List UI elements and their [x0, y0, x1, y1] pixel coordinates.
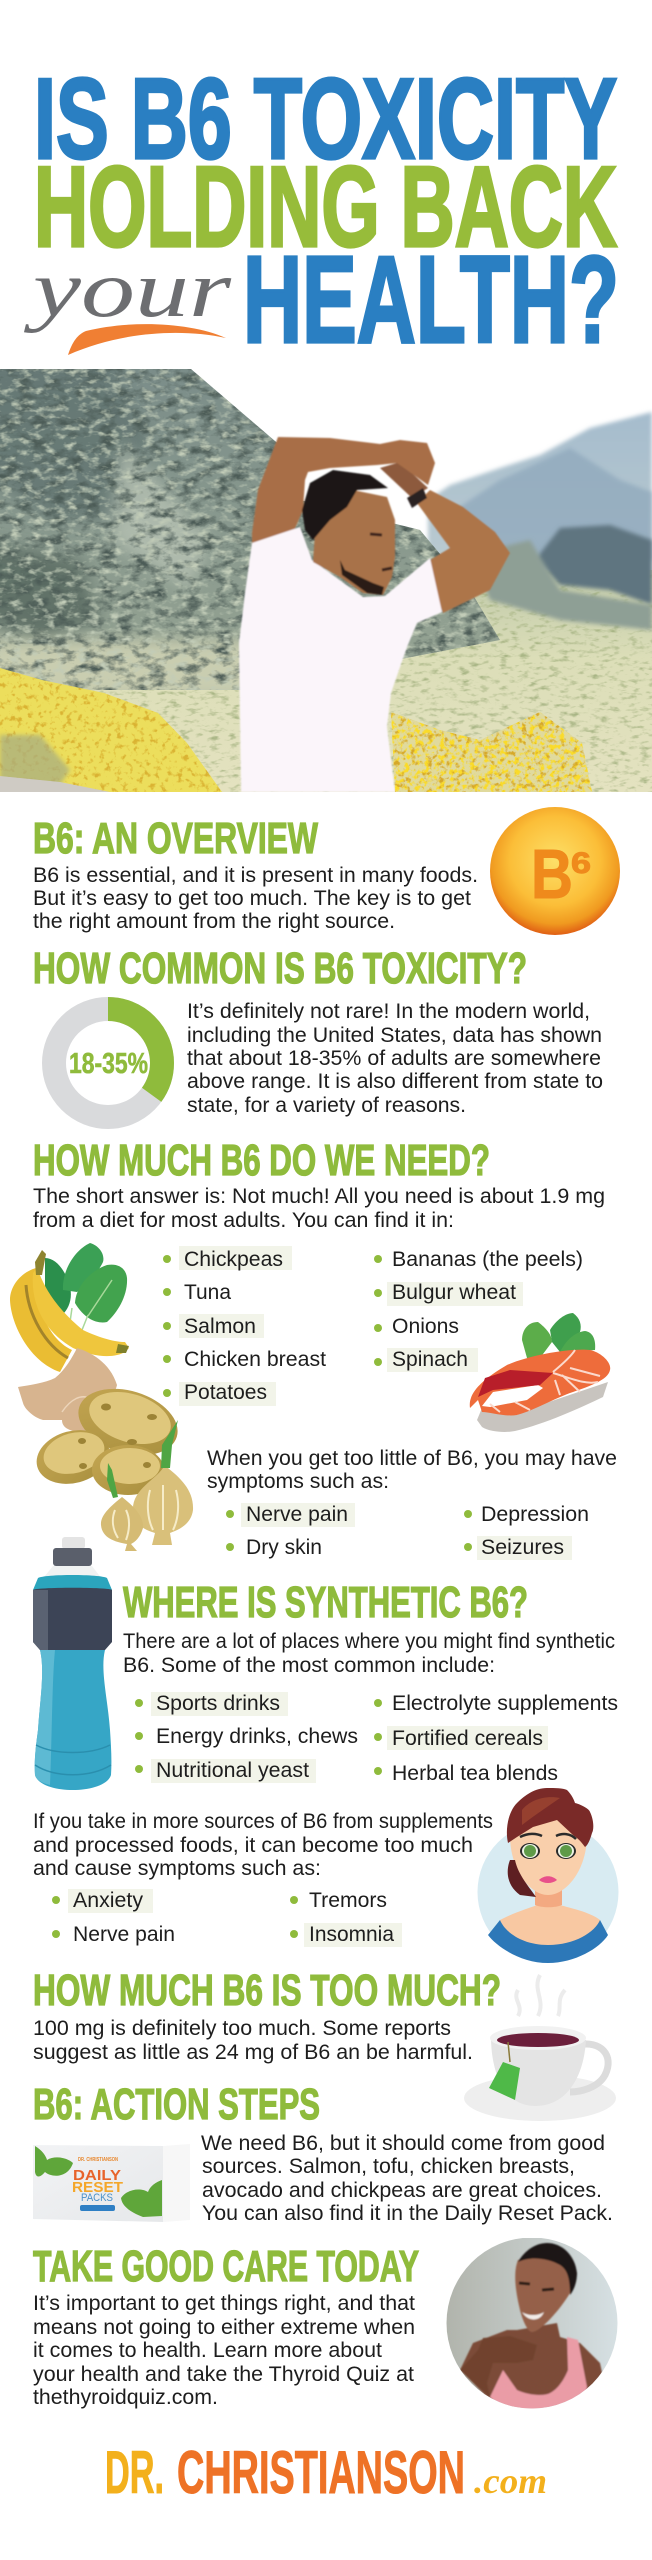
- list: deficiency symptoms: Seizures: [481, 1535, 564, 1559]
- footer logo: .com: [474, 2461, 547, 2501]
- section: synthetic B6: [33, 1537, 618, 1963]
- action steps paragraph: avocado and chickpeas are great choices.: [202, 2178, 602, 2202]
- beard: [340, 560, 384, 595]
- illustration: sports bottle: [33, 1537, 112, 1790]
- icon: B6 capsule: [490, 807, 620, 935]
- title: [24, 56, 619, 369]
- too much paragraph: [33, 2016, 473, 2064]
- list: synthetic sources: Sports drinks: [156, 1691, 280, 1715]
- illustration: cup of tea: [464, 1975, 616, 2121]
- how common paragraph: state, for a variety of reasons.: [187, 1093, 466, 1117]
- spinach leaves: [45, 1243, 127, 1330]
- watch: [407, 488, 427, 508]
- raised arm right: [417, 490, 510, 613]
- list: B6 foods: [163, 1246, 583, 1406]
- take good care paragraph: It’s important to get things right, and that: [33, 2291, 415, 2315]
- donut chart 18-35%: [54, 1009, 162, 1117]
- take good care paragraph: it comes to health. Learn more about: [33, 2338, 382, 2362]
- section: too much: [33, 1966, 616, 2121]
- forearm and upper arm left: [252, 437, 435, 547]
- product: daily reset packs box: DR. CHRISTIANSON: [78, 2157, 118, 2163]
- eye and mouth: [370, 534, 392, 570]
- list: B6 foods: Bananas (the peels): [392, 1247, 583, 1271]
- illustration: unwell woman: [478, 1788, 618, 1963]
- action steps paragraph: We need B6, but it should come from good: [201, 2131, 605, 2155]
- bananas: [10, 1250, 129, 1372]
- hair: [302, 470, 388, 540]
- right dark ridge: [535, 525, 652, 605]
- paragraph: too much B6: If you take in more sources of B6 from supplements: [33, 1809, 493, 1833]
- list: B6 foods: Chicken breast: [184, 1347, 326, 1371]
- action steps paragraph: [201, 2131, 613, 2225]
- yellow flowers left: [0, 660, 225, 792]
- white t-shirt: [239, 527, 442, 792]
- take good care paragraph: thethyroidquiz.com.: [33, 2385, 218, 2409]
- icon: B6 capsule: 6: [571, 847, 591, 880]
- list: synthetic sources: [135, 1691, 618, 1785]
- intro paragraph: from a diet for most adults. You can find it in:: [33, 1208, 454, 1232]
- potatoes: [31, 1377, 186, 1495]
- take good care paragraph: your health and take the Thyroid Quiz at: [33, 2362, 414, 2386]
- orange swoosh: [68, 324, 226, 355]
- take good care paragraph: means not going to either extreme when: [33, 2315, 415, 2339]
- list: B6 foods: Salmon: [184, 1314, 256, 1338]
- intro paragraph: The short answer is: Not much! All you need is about 1.9 mg: [33, 1184, 605, 1208]
- product: daily reset packs box: [33, 2144, 190, 2222]
- paragraph: too much B6: and cause symptoms such as:: [33, 1856, 321, 1880]
- list: excess symptoms: Insomnia: [309, 1922, 394, 1946]
- list: deficiency symptoms: Depression: [481, 1502, 589, 1526]
- section: B6 overview: [33, 807, 620, 935]
- left mountain: [0, 360, 510, 700]
- too much paragraph: 100 mg is definitely too much. Some reports: [33, 2016, 451, 2040]
- rock foreground: [0, 776, 110, 792]
- footer logo: CHRISTIANSON: [177, 2439, 465, 2506]
- icon: B6 capsule: B: [531, 835, 573, 913]
- section: take good care: [33, 2238, 618, 2412]
- photo: smiling woman: [446, 2238, 618, 2412]
- how common paragraph: [187, 999, 603, 1117]
- list: synthetic sources: Nutritional yeast: [156, 1758, 309, 1782]
- list: B6 foods: Bulgur wheat: [392, 1280, 516, 1304]
- footer logo: DR.: [105, 2439, 164, 2506]
- hero photo: man stretching in desert: [0, 360, 652, 795]
- overview paragraph: But it’s easy to get too much. The key is to get: [33, 886, 471, 910]
- list: synthetic sources: Herbal tea blends: [392, 1761, 558, 1785]
- how common paragraph: above range. It is also different from state to: [187, 1069, 603, 1093]
- synthetic intro paragraph: There are a lot of places where you might find synthetic: [123, 1629, 615, 1653]
- list: excess symptoms: Anxiety: [73, 1888, 143, 1912]
- product: daily reset packs box: RESET: [72, 2179, 123, 2196]
- heading: action steps: B6: ACTION STEPS: [33, 2080, 320, 2129]
- action steps paragraph: You can also find it in the Daily Reset Pack.: [202, 2201, 613, 2225]
- synthetic intro paragraph: B6. Some of the most common include:: [123, 1653, 495, 1677]
- illustration: salmon and spinach: [470, 1313, 610, 1432]
- yellow flowers right: [391, 712, 592, 792]
- action steps paragraph: sources. Salmon, tofu, chicken breasts,: [202, 2154, 575, 2178]
- list: deficiency symptoms: Dry skin: [246, 1535, 322, 1559]
- list: synthetic sources: Energy drinks, chews: [156, 1724, 358, 1748]
- far blue mountains: [426, 410, 652, 570]
- too much paragraph: suggest as little as 24 mg of B6 an be harmful.: [33, 2040, 473, 2064]
- list: excess symptoms: [52, 1888, 402, 1947]
- list: B6 foods: Onions: [392, 1314, 459, 1338]
- man figure: [239, 437, 510, 792]
- face and neck: [313, 490, 395, 595]
- paragraph: too little B6: symptoms such as:: [207, 1469, 389, 1493]
- paragraph: too little B6: When you get too little of B6, you may have: [207, 1446, 617, 1470]
- heading: overview: B6: AN OVERVIEW: [33, 814, 318, 863]
- list: B6 foods: Chickpeas: [184, 1247, 283, 1271]
- product: daily reset packs box: DAILY: [73, 2167, 121, 2184]
- list: B6 foods: Potatoes: [184, 1380, 267, 1404]
- overview paragraph: B6 is essential, and it is present in many foods.: [33, 863, 478, 887]
- synthetic intro paragraph: [123, 1629, 615, 1677]
- valley floor: [90, 570, 652, 792]
- list: synthetic sources: Fortified cereals: [392, 1726, 543, 1750]
- illustration: food pile: [10, 1243, 193, 1551]
- list: deficiency symptoms: Nerve pain: [246, 1502, 348, 1526]
- paragraph: too much B6: and processed foods, it can become too much: [33, 1833, 473, 1857]
- list: B6 foods: Spinach: [392, 1347, 468, 1371]
- script word your: your: [24, 246, 232, 334]
- chickpeas: [18, 1348, 117, 1432]
- donut chart 18-35%: 18-35%: [69, 1048, 148, 1080]
- how common paragraph: including the United States, data has shown: [187, 1023, 602, 1047]
- paragraph: too little B6: [207, 1446, 617, 1493]
- onions: [101, 1420, 193, 1551]
- list: B6 foods: Tuna: [184, 1280, 231, 1304]
- heading: take good care: TAKE GOOD CARE TODAY: [33, 2242, 419, 2291]
- list: synthetic sources: Electrolyte supplements: [392, 1691, 618, 1715]
- intro paragraph: [33, 1184, 605, 1232]
- list: excess symptoms: Tremors: [309, 1888, 387, 1912]
- how common paragraph: It’s definitely not rare! In the modern world,: [187, 999, 590, 1023]
- section: action steps: [33, 2080, 613, 2225]
- how common paragraph: that about 18-35% of adults are somewhere: [187, 1046, 601, 1070]
- section: how common: [33, 944, 603, 1117]
- product: daily reset packs box: PACKS: [81, 2192, 113, 2204]
- overview paragraph: [33, 863, 478, 933]
- arm behind head: [380, 462, 428, 498]
- list: excess symptoms: Nerve pain: [73, 1922, 175, 1946]
- take good care paragraph: [33, 2291, 415, 2409]
- list: deficiency symptoms: [226, 1502, 589, 1560]
- section: how much do we need: [10, 1136, 617, 1560]
- footer logo: [105, 2439, 547, 2506]
- paragraph: too much B6: [33, 1809, 493, 1880]
- overview paragraph: the right amount from the right source.: [33, 909, 395, 933]
